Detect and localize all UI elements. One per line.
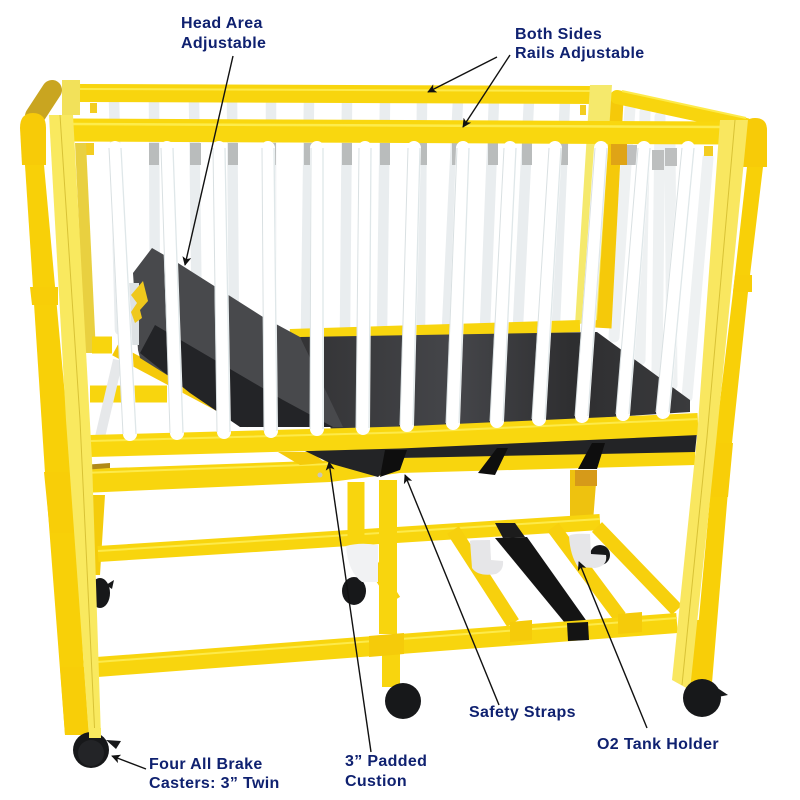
label: padded cushion: Custion: [345, 773, 407, 790]
head frame: [115, 350, 250, 422]
head mattress side: [140, 325, 333, 427]
centre post: [379, 480, 397, 634]
arrow: head area: [185, 56, 233, 265]
right side top rail: [617, 97, 746, 125]
arrow: front rail: [463, 55, 510, 127]
front slats: [109, 148, 694, 434]
head frame wedge: [278, 452, 325, 465]
label: safety straps: Safety Straps: [469, 704, 576, 721]
label: both sides rails: Rails Adjustable: [515, 45, 644, 62]
arrow: casters: [112, 756, 146, 769]
bracket: [82, 463, 110, 470]
back left lower post: [85, 495, 105, 575]
front top rail: [72, 130, 728, 133]
label: casters: [112, 756, 280, 792]
right post: [693, 167, 763, 683]
under mattress: [305, 433, 697, 477]
front right caster: [683, 679, 721, 717]
label: casters: Four All Brake: [149, 756, 263, 773]
under-bed base: [85, 470, 677, 719]
front rails: [72, 124, 728, 446]
right panel: [672, 120, 748, 690]
back white slats: [114, 100, 565, 332]
rear casters: [90, 578, 110, 608]
strap on front bar: [567, 622, 589, 641]
front left caster: [73, 732, 109, 768]
label: safety straps: [405, 475, 576, 721]
arrow: safety straps: [405, 475, 499, 705]
oxygen tank strap: [495, 537, 588, 623]
label: O2 tank holder: O2 Tank Holder: [597, 736, 719, 753]
hook pegs: [85, 103, 713, 156]
mattress: [100, 248, 690, 437]
back light panels: [62, 80, 80, 115]
front frame: [20, 113, 767, 768]
bolt: [318, 472, 322, 478]
bar joints: [369, 612, 642, 657]
under mattress strip and rail: [82, 433, 697, 493]
lower side bars: [453, 527, 677, 623]
front mid rail: [90, 424, 698, 446]
label: padded cushion: [329, 462, 427, 790]
label: casters: Casters: 3” Twin: [149, 775, 280, 792]
bed back rail: [290, 326, 580, 335]
right side slats: [614, 108, 708, 397]
front centre caster: [385, 683, 421, 719]
label: O2 tank holder: [579, 562, 719, 753]
label: both sides rails: [428, 26, 644, 127]
back crib frame: [35, 80, 746, 397]
label: head area: Adjustable: [181, 35, 266, 52]
left panel: [49, 115, 101, 738]
label: both sides rails: Both Sides: [515, 26, 602, 43]
flat mattress: [300, 332, 690, 435]
white adjustable leg: [100, 360, 118, 437]
label: padded cushion: 3” Padded: [345, 753, 427, 770]
straps: [380, 443, 605, 477]
label: head area: Head Area: [181, 15, 263, 32]
rear right caster: [590, 545, 610, 565]
rear lower post: [570, 470, 597, 522]
tank holders: [470, 540, 503, 575]
centre rear post: [348, 482, 364, 540]
yellow clip: [131, 281, 148, 323]
back lower stubs: [90, 345, 167, 394]
back left corner rail: [35, 90, 52, 116]
mid cross bar: [98, 522, 600, 554]
back right post: [603, 100, 615, 328]
panel tip over caster: [89, 728, 101, 738]
white adjuster plate: [128, 283, 139, 345]
front bottom bar: [97, 623, 677, 667]
head mattress top: [133, 248, 343, 427]
label: head area: [181, 15, 266, 265]
arrow: O2 tank holder: [579, 562, 647, 728]
left post: [25, 165, 88, 735]
side rail lower: [82, 450, 695, 493]
back top rail: [80, 93, 595, 95]
arrow: padded cushion: [329, 462, 371, 752]
arrow: back rail: [428, 57, 497, 92]
slat shadow bands: [149, 143, 568, 165]
